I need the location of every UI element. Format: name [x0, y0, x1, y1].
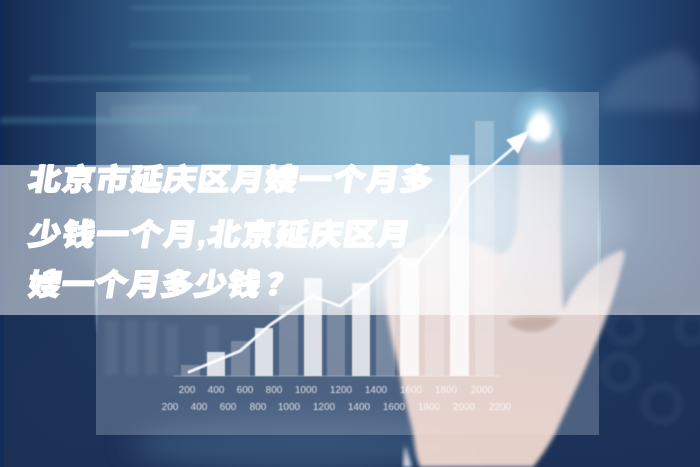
axis labels row 2: 1200 — [313, 402, 336, 413]
blurred background chart right — [600, 48, 700, 110]
glowing fingertip — [510, 86, 570, 158]
trend arrow — [189, 131, 529, 372]
axis labels row 1: 400 — [208, 385, 225, 396]
axis labels row 2: 2200 — [489, 402, 512, 413]
axis labels row 1: 1800 — [435, 385, 458, 396]
bar chart — [173, 121, 500, 376]
axis labels row 2: 600 — [220, 402, 237, 413]
axis labels row 1: 600 — [237, 385, 254, 396]
axis labels row 1: 800 — [266, 385, 283, 396]
blurred bokeh circles — [604, 312, 700, 421]
title: 北京市延庆区月嫂一个月多 — [26, 162, 436, 197]
axis labels row 2 — [162, 402, 512, 413]
axis labels row 2: 1800 — [418, 402, 441, 413]
axis labels row 2: 2000 — [453, 402, 476, 413]
axis labels row 1: 200 — [179, 385, 196, 396]
title — [26, 162, 436, 302]
hand — [385, 112, 625, 467]
title: 嫂一个月多少钱？ — [26, 267, 302, 302]
axis labels row 1: 1600 — [400, 385, 423, 396]
axis labels row 2: 800 — [250, 402, 267, 413]
blurred chart inside panel — [105, 105, 219, 375]
axis labels row 1: 1200 — [330, 385, 353, 396]
axis labels row 1: 1000 — [295, 385, 318, 396]
panel edge glows — [95, 195, 600, 335]
axis labels row 1 — [179, 385, 494, 396]
axis labels row 2: 400 — [191, 402, 208, 413]
axis labels row 2: 1000 — [278, 402, 301, 413]
translucent panel — [96, 92, 599, 435]
axis labels row 1: 1400 — [365, 385, 388, 396]
title: 少钱一个月,北京延庆区月 — [26, 217, 413, 252]
axis labels row 1: 2000 — [471, 385, 494, 396]
axis labels row 2: 1600 — [383, 402, 406, 413]
title band — [0, 165, 700, 315]
axis labels row 2: 1400 — [348, 402, 371, 413]
axis labels row 2: 200 — [162, 402, 179, 413]
